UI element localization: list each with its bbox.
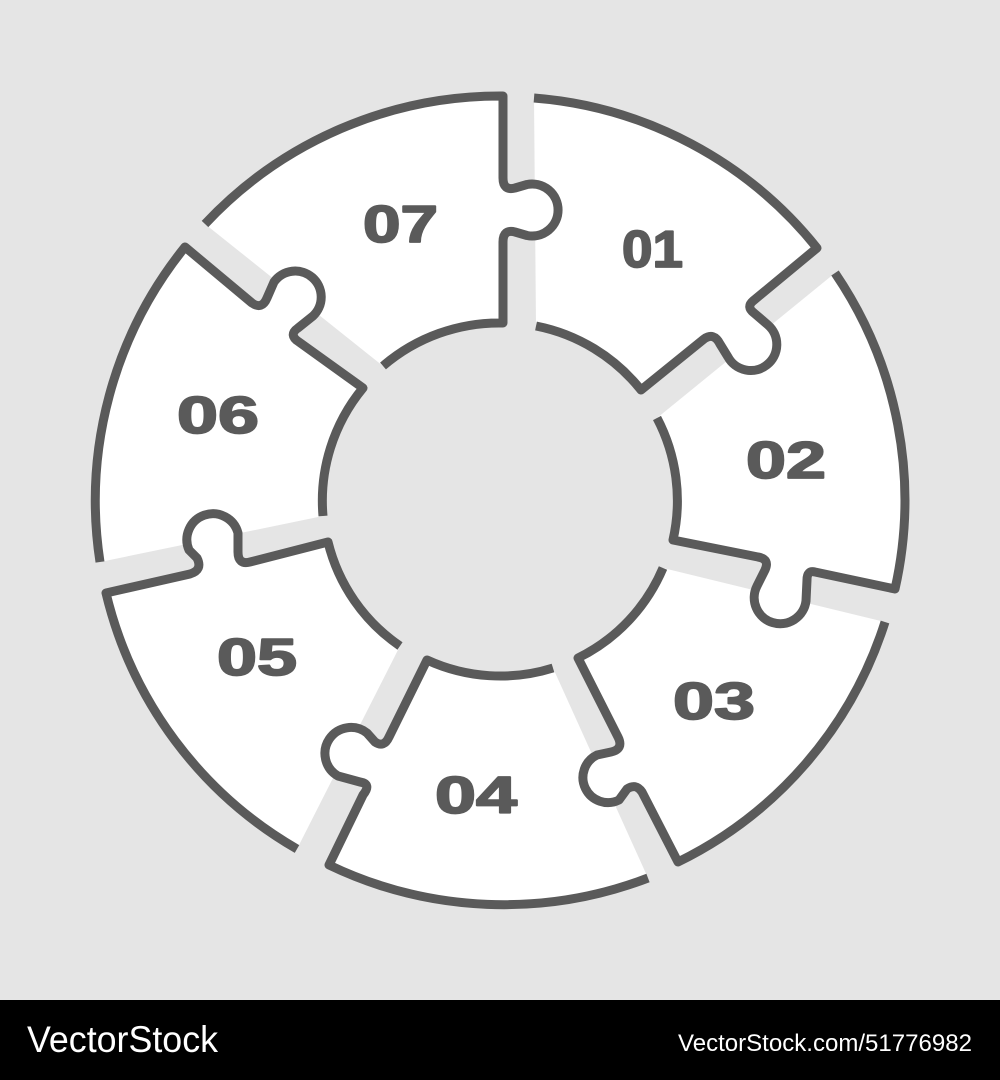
puzzle piece 03	[578, 568, 885, 862]
puzzle piece 03: 03	[673, 673, 755, 731]
footer bar	[0, 1000, 1000, 1080]
puzzle piece 04	[325, 660, 648, 905]
puzzle piece 02	[657, 273, 905, 624]
footer bar: VectorStock.com/51776982	[678, 1030, 972, 1057]
puzzle piece 05	[106, 514, 400, 849]
puzzle piece 06: 06	[177, 387, 259, 445]
puzzle piece 04: 04	[435, 767, 517, 825]
puzzle piece 01: 01	[622, 221, 683, 279]
puzzle piece 07: 07	[363, 196, 438, 254]
puzzle piece 02: 02	[746, 432, 826, 490]
puzzle piece 05: 05	[217, 629, 297, 687]
puzzle piece 06	[95, 247, 363, 562]
puzzle piece 01	[534, 98, 817, 390]
puzzle piece 07	[205, 96, 558, 366]
footer brand: VectorStock	[27, 1019, 218, 1060]
